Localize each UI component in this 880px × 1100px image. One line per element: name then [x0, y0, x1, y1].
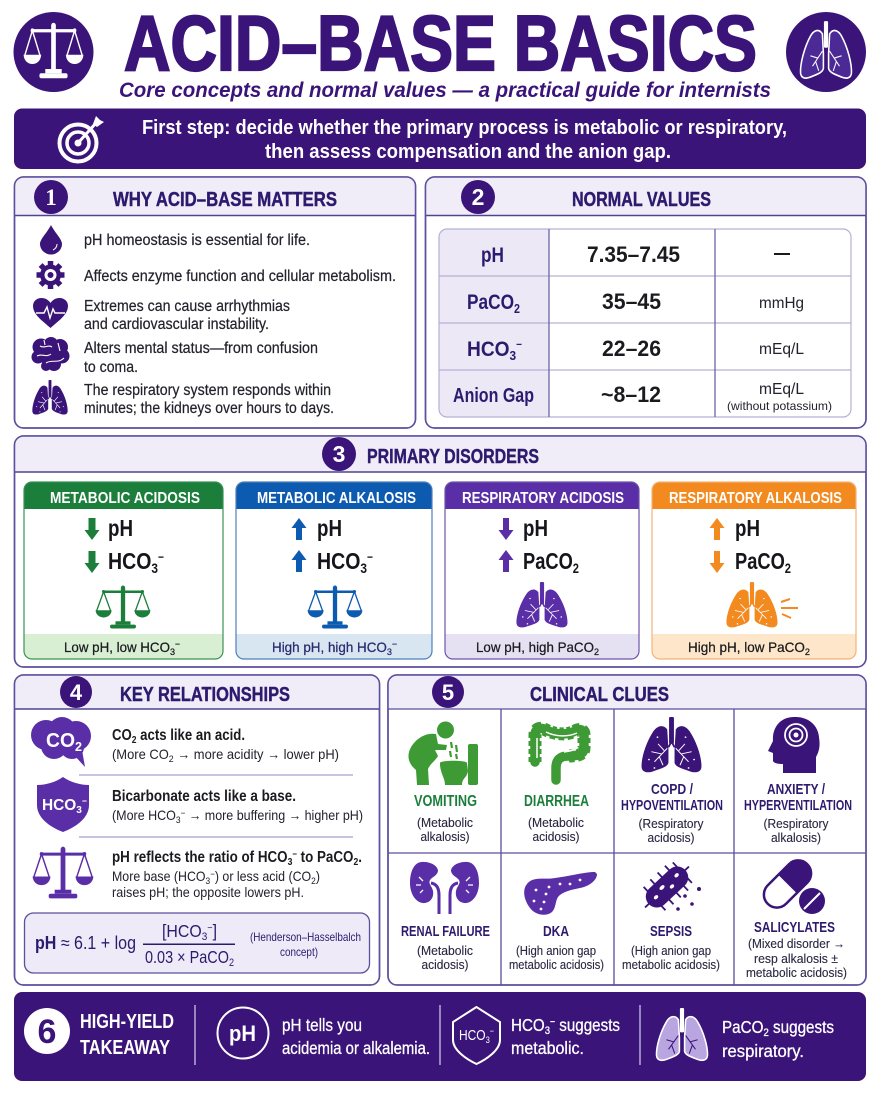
clue: sepsis: (High anion gap	[631, 944, 711, 958]
banner: high-yield takeaway	[14, 992, 866, 1081]
text: bicarbonate: (More HCO	[112, 807, 184, 823]
arrows	[498, 518, 514, 572]
text	[84, 298, 290, 333]
text: PaCO2	[722, 1017, 834, 1061]
text: and cardiovascular instability.	[84, 316, 269, 333]
card: respiratory alkalosis: RESPIRATORY ALKALOSIS	[669, 490, 842, 507]
text: CO2	[112, 727, 339, 765]
text: ratio: 2	[353, 857, 359, 868]
text: CO2: 2	[132, 735, 137, 746]
banner text: First step: decide whether the primary process is metabolic or respiratory,	[142, 117, 787, 139]
text: bicarbonate: −	[181, 808, 185, 818]
icon: HCO3 shield: 3	[486, 1035, 490, 1046]
row: pH: 7.35–7.45	[587, 242, 680, 267]
card: metabolic alkalosis: HCO	[317, 548, 368, 574]
formula box: 2	[229, 957, 234, 969]
text: HCO3	[511, 1015, 620, 1058]
card: metabolic acidosis	[24, 482, 223, 659]
card: metabolic acidosis: HCO	[108, 548, 159, 574]
panel: primary disorders	[14, 436, 866, 667]
icon: lungs badge	[786, 12, 866, 92]
icon: HCO3 shield: −	[82, 796, 87, 806]
icon: lungs	[516, 582, 568, 627]
clue: COPD	[621, 717, 723, 845]
icon: lungs	[657, 1008, 707, 1060]
text: ratio: )	[316, 868, 320, 884]
card: respiratory acidosis: RESPIRATORY ACIDOSIS	[462, 490, 624, 507]
text	[84, 340, 318, 376]
formula box: concept)	[280, 945, 318, 959]
text: HCO3: HCO	[511, 1015, 550, 1035]
panel: key relationships	[14, 675, 380, 985]
clue: anxiety: alkalosis)	[771, 831, 821, 845]
text: Affects enzyme function and cellular metabolism.	[84, 268, 396, 285]
card: respiratory acidosis: 2	[594, 647, 599, 658]
text: ratio: .	[358, 849, 362, 866]
formula box: [HCO	[162, 921, 206, 941]
text: ratio: to PaCO	[297, 849, 353, 866]
text: bicarbonate: 3	[176, 815, 181, 826]
clue: COPD: HYPOVENTILATION	[621, 797, 723, 814]
clue: DKA: metabolic acidosis)	[509, 958, 604, 972]
text: The respiratory system responds within	[84, 382, 331, 399]
icon: scales badge	[14, 12, 94, 92]
icon: HCO3 shield: −	[490, 1026, 494, 1036]
text: CO2: CO	[112, 727, 135, 744]
heading: CLINICAL CLUES	[530, 684, 669, 706]
clue: diarrhea: DIARRHEA	[524, 793, 589, 810]
row: PaCO2: 2	[514, 301, 520, 316]
text: ratio: pH reflects the ratio of HCO	[112, 849, 315, 866]
clue: salicylates: SALICYLATES	[754, 919, 835, 936]
text: HCO3: metabolic.	[511, 1038, 584, 1058]
arrows	[710, 518, 724, 573]
text: Alters mental status—from confusion	[84, 340, 318, 357]
icon: heart	[33, 298, 68, 328]
badge 2: 2	[472, 184, 484, 210]
formula box	[24, 913, 370, 973]
icon: lungs exhaling	[726, 582, 798, 627]
arrows	[84, 518, 100, 573]
clue: salicylates: (Mixed disorder →	[748, 937, 845, 951]
text: to coma.	[84, 359, 138, 376]
text: PaCO2: 2	[763, 1027, 769, 1039]
card: respiratory alkalosis: High pH, low PaCO	[688, 639, 809, 655]
icon: kidneys	[410, 862, 479, 914]
card: metabolic alkalosis: 3	[387, 647, 392, 658]
clue: DKA: (High anion gap	[516, 944, 596, 958]
clue: renal failure	[401, 862, 490, 972]
card: metabolic acidosis: 3	[151, 560, 158, 576]
icon: CO2 cloud: 2	[75, 739, 82, 754]
formula box: −	[207, 923, 213, 934]
icon: head with target	[768, 717, 820, 773]
row: PaCO2	[467, 289, 804, 316]
icon: bacterium	[633, 854, 701, 920]
card: respiratory acidosis: 2	[573, 560, 579, 576]
card: respiratory acidosis	[445, 482, 639, 659]
icon: scale	[308, 586, 362, 628]
clue: COPD: (Respiratory	[638, 817, 704, 831]
badge 2	[461, 180, 495, 214]
card: metabolic acidosis: 3	[170, 647, 175, 658]
icon: CO2 cloud	[31, 717, 91, 767]
icon: gear	[36, 261, 64, 289]
formula box: 3	[202, 931, 207, 943]
icon: scale	[96, 586, 150, 628]
clue: renal failure: (Metabolic	[417, 944, 473, 958]
subtitle: Core concepts and normal values — a practical guide for internists	[119, 79, 771, 102]
card: metabolic alkalosis: −	[367, 550, 373, 564]
clue: vomiting	[408, 722, 478, 844]
icon: drop	[40, 225, 62, 255]
card: respiratory alkalosis	[652, 482, 856, 659]
row: PaCO2: mmHg	[759, 295, 804, 312]
text: ratio	[112, 849, 362, 900]
text: pH: pH tells you	[282, 1015, 362, 1035]
text: ratio: 3	[206, 876, 210, 887]
badge 4: 4	[70, 680, 83, 705]
card: metabolic acidosis: pH	[108, 515, 133, 541]
icon: pancreas	[524, 872, 597, 915]
clue: diarrhea	[524, 728, 589, 844]
arrows	[292, 518, 306, 572]
card: metabolic alkalosis: pH	[317, 515, 342, 541]
icon: HCO3 shield	[453, 1007, 500, 1064]
icon: pills	[758, 854, 826, 916]
card: respiratory alkalosis: 2	[785, 560, 791, 576]
row: PaCO2: PaCO	[467, 291, 524, 314]
clue: vomiting: alkalosis)	[420, 830, 470, 844]
text: minutes; the kidneys over hours to days.	[84, 400, 334, 417]
badge 5: 5	[442, 680, 454, 705]
icon: lungs	[642, 717, 701, 772]
row: HCO3	[467, 336, 804, 363]
text: pH	[282, 1015, 430, 1058]
takeaway heading: TAKEAWAY	[80, 1037, 171, 1059]
text: ratio: −	[292, 849, 297, 859]
badge 4	[60, 676, 92, 708]
row: HCO3: −	[516, 339, 522, 351]
clue: COPD: acidosis)	[648, 831, 694, 845]
clue: vomiting: (Metabolic	[417, 816, 473, 830]
icon: HCO3 shield	[37, 777, 89, 832]
text: HCO3: suggests	[555, 1015, 620, 1035]
text: Extremes can cause arrhythmias	[84, 298, 290, 315]
clue: DKA: DKA	[543, 923, 569, 940]
text: PaCO2: respiratory.	[722, 1041, 804, 1061]
text: ratio: −	[210, 869, 215, 879]
formula box: 0.03 × PaCO	[145, 947, 247, 967]
formula box: ]	[213, 921, 217, 941]
text: HCO3: −	[550, 1017, 555, 1028]
row: pH: pH	[481, 244, 504, 267]
icon: target	[60, 116, 104, 162]
panel: why acid-base matters	[14, 177, 416, 428]
panel: normal values	[426, 177, 866, 428]
heading: KEY RELATIONSHIPS	[120, 684, 290, 706]
badge 3	[322, 437, 356, 471]
clue: anxiety: ANXIETY /	[767, 781, 826, 798]
banner: first step: then assess compensation and the anion gap.	[265, 141, 671, 163]
text: ratio: 3	[288, 857, 293, 868]
text: bicarbonate: → more buffering → higher pH)	[185, 807, 363, 823]
clue: renal failure: RENAL FAILURE	[401, 923, 490, 940]
formula box: (Henderson–Hasselbalch	[250, 930, 361, 944]
icon: person vomiting	[408, 722, 478, 785]
text: PaCO2: PaCO	[722, 1017, 770, 1037]
card: metabolic acidosis: −	[175, 639, 180, 649]
icon: brain	[32, 337, 70, 371]
text: CO2: (More CO	[112, 746, 173, 762]
badge 3: 3	[333, 441, 345, 467]
card: metabolic acidosis: −	[158, 550, 164, 564]
row: pH	[481, 242, 790, 267]
row: HCO3: mEq/L	[759, 341, 804, 358]
clue: diarrhea: (Metabolic	[528, 816, 584, 830]
icon: lungs	[32, 380, 68, 415]
row: HCO3: 22–26	[602, 336, 661, 361]
icon: HCO3 shield: HCO	[42, 797, 78, 814]
text: CO2: acts like an acid.	[137, 727, 245, 744]
text: bicarbonate: Bicarbonate acts like a base.	[112, 788, 296, 805]
clue: salicylates	[746, 854, 847, 980]
badge 1: 1	[45, 185, 57, 210]
title: ACID–BASE BASICS	[124, 0, 757, 87]
heading: WHY ACID–BASE MATTERS	[113, 189, 337, 211]
formula box: pH ≈ 6.1 + log	[35, 933, 136, 953]
icon: pH circle	[218, 1008, 268, 1058]
row: anion gap	[453, 381, 832, 413]
icon: CO2 cloud: CO	[46, 730, 76, 752]
clue: diarrhea: acidosis)	[532, 830, 580, 844]
text: pH homeostasis is essential for life.	[84, 232, 310, 249]
card: metabolic alkalosis: High pH, high HCO	[272, 639, 392, 655]
clue: sepsis: SEPSIS	[650, 923, 692, 940]
heading: NORMAL VALUES	[572, 189, 711, 211]
row: HCO3: HCO	[467, 338, 514, 361]
card: metabolic alkalosis: METABOLIC ALKALOSIS	[257, 490, 416, 507]
text: CO2: 2	[169, 754, 174, 765]
card: respiratory acidosis: pH	[523, 515, 548, 541]
card: respiratory acidosis: PaCO	[523, 548, 586, 574]
text: ratio: 2	[311, 876, 316, 887]
badge 1	[34, 180, 68, 214]
text: PaCO2: suggests	[769, 1017, 834, 1037]
clue: salicylates: metabolic acidosis)	[746, 966, 847, 980]
badge 6	[24, 1008, 70, 1054]
panel: clinical clues	[388, 675, 866, 985]
card: metabolic acidosis: METABOLIC ACIDOSIS	[50, 490, 200, 507]
icon: HCO3 shield: 3	[76, 804, 82, 816]
clue: salicylates: resp alkalosis ±	[754, 952, 838, 966]
card: respiratory alkalosis: PaCO	[735, 548, 798, 574]
text: ratio: ) or less acid (CO	[215, 868, 311, 884]
row: anion gap: ~8–12	[601, 382, 661, 407]
takeaway heading: HIGH-YIELD	[80, 1011, 174, 1033]
icon: scale	[33, 847, 93, 898]
clue: vomiting: VOMITING	[414, 793, 477, 810]
banner: first step	[14, 108, 866, 169]
text	[84, 382, 334, 417]
row: HCO3: 3	[510, 348, 516, 363]
text: pH: acidemia or alkalemia.	[282, 1038, 430, 1058]
table	[439, 229, 851, 417]
clue: sepsis: metabolic acidosis)	[622, 958, 720, 972]
card: metabolic alkalosis	[236, 482, 432, 659]
row: anion gap: Anion Gap	[453, 385, 534, 407]
takeaway heading	[80, 1011, 174, 1059]
clue: COPD: COPD /	[651, 781, 694, 798]
card: respiratory acidosis: Low pH, high PaCO	[476, 639, 600, 655]
icon: colon	[535, 728, 584, 780]
text: HCO3: 3	[545, 1025, 550, 1037]
row: PaCO2: 35–45	[602, 289, 661, 314]
clue: sepsis	[622, 854, 720, 972]
text: ratio: raises pH; the opposite lowers pH.	[112, 884, 304, 900]
badge 6: 6	[38, 1013, 56, 1051]
badge 5	[432, 676, 464, 708]
clue: renal failure: acidosis)	[422, 958, 468, 972]
text: CO2: → more acidity → lower pH)	[174, 746, 339, 762]
clue: DKA	[509, 872, 604, 972]
card: metabolic alkalosis: 3	[360, 560, 367, 576]
icon: pH circle: pH	[229, 1021, 256, 1046]
clue: anxiety	[744, 717, 852, 845]
clue: anxiety: (Respiratory	[764, 817, 829, 831]
card: metabolic acidosis: Low pH, low HCO	[64, 639, 175, 655]
text: bicarbonate	[112, 788, 363, 826]
card: respiratory alkalosis: 2	[805, 647, 810, 658]
card: metabolic alkalosis: −	[392, 639, 397, 649]
heading: PRIMARY DISORDERS	[367, 446, 539, 468]
text: ratio: More base (HCO	[112, 868, 218, 884]
card: respiratory alkalosis: pH	[735, 515, 760, 541]
icon: HCO3 shield: HCO	[459, 1027, 492, 1044]
row: anion gap: mEq/L	[759, 381, 804, 398]
row: anion gap: (without potassium)	[727, 399, 832, 413]
